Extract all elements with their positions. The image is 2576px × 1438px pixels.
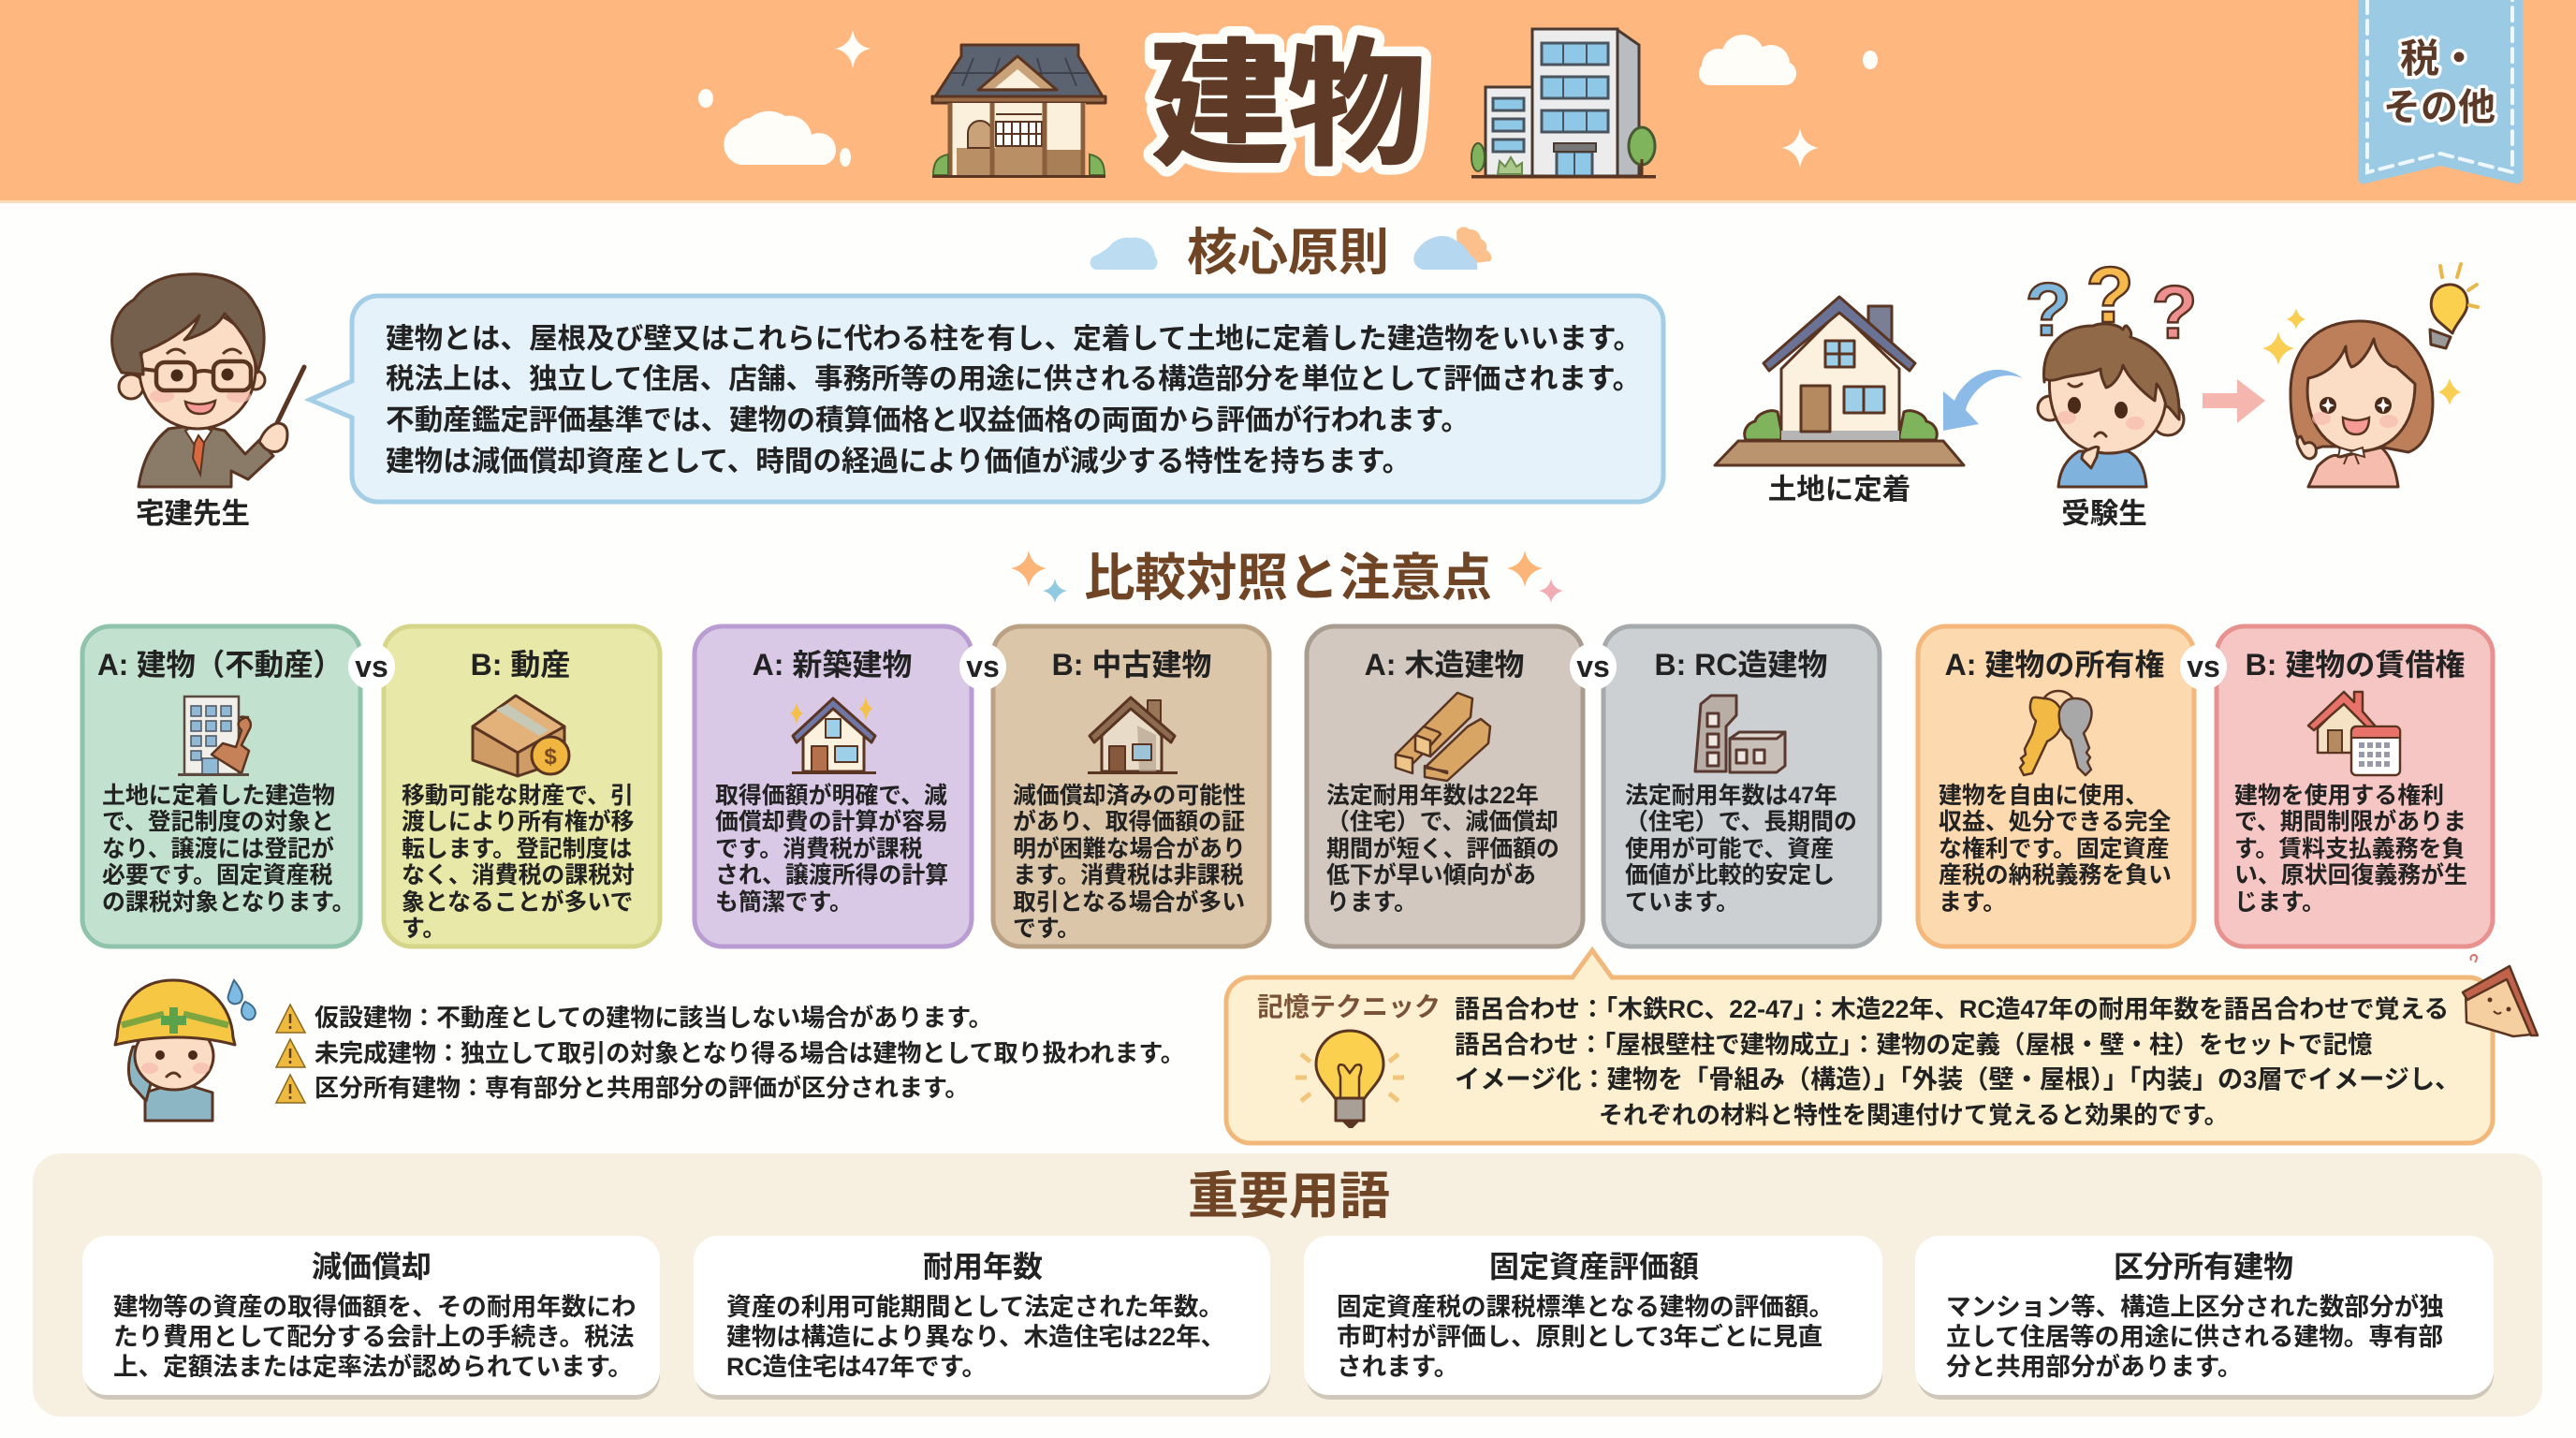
comparison pair 4: [1918, 626, 2493, 946]
vs badge: [1570, 643, 1617, 690]
card: movable property: 転します。登記制度は: [402, 836, 633, 862]
tag ribbon: [2358, 0, 2523, 183]
term card: condominium: 立して住居等の用途に供される建物。専有部: [1946, 1323, 2443, 1351]
term card: useful life: [694, 1236, 1270, 1400]
card: ownership: 収益、処分できる完全: [1939, 809, 2172, 835]
icon: building and stamp: [178, 697, 251, 776]
card: movable property: 渡しにより所有権が移: [402, 808, 635, 835]
card: used building: 明が困難な場合があり: [1013, 835, 1246, 862]
card: new building: [695, 626, 972, 946]
term card: depreciation: 減価償却: [312, 1250, 432, 1284]
term card: depreciation: 上、定額法または定率法が認められています。: [113, 1353, 633, 1381]
card: lease right: で、期間制限がありま: [2234, 808, 2466, 835]
icon: light bulb: [2430, 264, 2478, 348]
card: building real estate: 土地に定着した建造物: [102, 783, 335, 809]
card: new building: 価償却費の計算が容易: [715, 808, 948, 835]
card: RC building: B: RC造建物: [1655, 648, 1827, 682]
arrow: understanding: [2203, 379, 2265, 423]
memory techniques text: 語呂合わせ：「屋根壁柱で建物成立」：建物の定義（屋根・壁・柱）をセットで記憶: [1455, 1031, 2372, 1059]
vs badge: vs: [2187, 650, 2220, 683]
term card: assessed value: [1304, 1236, 1882, 1400]
core principle text: 不動産鑑定評価基準では、建物の積算価格と収益価格の両面から評価が行われます。: [386, 404, 1470, 436]
card: lease right: 建物を使用する権利: [2234, 783, 2444, 809]
term card: useful life: 建物は構造により異なり、木造住宅は22年、: [726, 1323, 1225, 1351]
card: ownership: [1918, 626, 2194, 946]
card: building real estate: [82, 626, 360, 946]
icon: house and calendar: [2308, 692, 2400, 775]
vs badge: vs: [966, 650, 1000, 683]
term card: assessed value: 固定資産評価額: [1489, 1250, 1699, 1284]
icon: keys: [2020, 691, 2092, 775]
card: RC building: 価値が比較的安定し: [1625, 861, 1835, 888]
card: lease right: い、原状回復義務が生: [2234, 861, 2467, 888]
warnings list: [276, 1004, 1185, 1103]
card: used building: 減価償却済みの可能性: [1013, 783, 1246, 809]
term card: depreciation: たり費用として配分する会計上の手続き。税法: [113, 1323, 635, 1351]
worker character: [115, 980, 256, 1121]
icon: lumber: [1396, 693, 1490, 781]
card: used building: ます。消費税は非課税: [1013, 862, 1244, 888]
card: ownership: 建物を自由に使用、: [1939, 783, 2148, 809]
card: movable property: 象となることが多いで: [402, 888, 633, 916]
term card: useful life: 資産の利用可能期間として法定された年数。: [726, 1293, 1223, 1321]
memory techniques text: それぞれの材料と特性を関連付けて覚えると効果的です。: [1599, 1101, 2229, 1129]
icon: new house with sparkles: [790, 697, 876, 774]
heading: core principle with clouds: [1090, 225, 1491, 281]
term card: depreciation: [82, 1236, 660, 1400]
card: building real estate: 必要です。固定資産税: [102, 862, 333, 888]
comparison pair 2: [695, 626, 1269, 946]
card: lease right: B: 建物の賃借権: [2246, 648, 2465, 682]
card: RC building: 法定耐用年数は47年: [1625, 783, 1837, 809]
card: used building: B: 中古建物: [1052, 648, 1211, 682]
icon: old house: [1088, 697, 1178, 774]
card: movable property: なく、消費税の課税対: [402, 862, 635, 888]
vs badge: [959, 643, 1006, 690]
card: used building: です。: [1013, 916, 1080, 942]
term card: condominium: [1915, 1236, 2494, 1400]
card: building real estate: なり、譲渡には登記が: [102, 835, 334, 862]
card: ownership: な権利です。固定資産: [1939, 836, 2169, 862]
card: lease right: [2217, 626, 2493, 946]
core principle text: 建物は減価償却資産として、時間の経過により価値が減少する特性を持ちます。: [386, 445, 1411, 477]
card: new building: 取得価額が明確で、減: [715, 782, 947, 809]
icon: office building: [1471, 29, 1656, 178]
card: movable property: B: 動産: [471, 648, 570, 682]
core principle text: 建物とは、屋根及び壁又はこれらに代わる柱を有し、定着して土地に定着した建造物をいいます。: [386, 323, 1642, 355]
term card: assessed value: されます。: [1337, 1353, 1458, 1381]
key terms heading: 重要用語: [1188, 1168, 1390, 1225]
card: RC building: ています。: [1625, 889, 1739, 916]
question marks: [2026, 251, 2197, 354]
card: ownership: ます。: [1939, 889, 2006, 916]
card: ownership: A: 建物の所有権: [1945, 648, 2164, 682]
term card: assessed value: 固定資産税の課税標準となる建物の評価額。: [1337, 1293, 1834, 1321]
card: new building: され、譲渡所得の計算: [715, 862, 948, 888]
comparison pair 3: [1307, 626, 1880, 946]
card: lease right: す。賃料支払義務を負: [2234, 836, 2465, 862]
memory label: 記憶テクニック: [1257, 992, 1441, 1021]
card: wooden building: 法定耐用年数は22年: [1326, 783, 1539, 809]
teacher body: [139, 425, 273, 487]
card: RC building: 使用が可能で、資産: [1625, 835, 1834, 862]
enlightened girl: [2262, 264, 2478, 487]
term card: depreciation: 建物等の資産の取得価額を、その耐用年数にわ: [113, 1293, 636, 1321]
land label: 土地に定着: [1768, 474, 1910, 506]
card: RC building: [1603, 626, 1880, 946]
title: 建物: [1151, 29, 1425, 182]
teacher character: [112, 274, 304, 487]
card: building real estate: の課税対象となります。: [102, 889, 356, 916]
question marks: ?: [2086, 251, 2134, 339]
warnings list: 仮設建物：不動産としての建物に該当しない場合があります。: [315, 1004, 993, 1032]
card: new building: です。消費税が課税: [715, 835, 923, 862]
icon: traditional japanese house: [932, 45, 1105, 178]
term card: condominium: マンション等、構造上区分された数部分が独: [1946, 1293, 2444, 1321]
icon: small house mascot: [2463, 955, 2538, 1036]
term card: assessed value: 市町村が評価し、原則として3年ごとに見直: [1337, 1323, 1822, 1351]
card: building real estate: で、登記制度の対象と: [102, 809, 334, 835]
header decoration: clouds and sparkles: [698, 30, 1878, 168]
icon: warning: [276, 1005, 305, 1103]
icon: RC building: [1695, 696, 1785, 772]
vs badge: [2180, 643, 2227, 690]
card: wooden building: [1307, 626, 1583, 946]
heading: comparison with sparkles: 比較対照と注意点: [1084, 550, 1492, 607]
heading: core principle with clouds: 核心原則: [1187, 225, 1389, 281]
question marks: ?: [2152, 271, 2197, 354]
term card: useful life: 耐用年数: [923, 1250, 1043, 1284]
memory technique callout: [1226, 950, 2493, 1143]
card: wooden building: 期間が短く、評価額の: [1326, 835, 1559, 862]
header band: [0, 0, 2576, 203]
comparison pair 1: [82, 626, 660, 946]
card: wooden building: ります。: [1326, 889, 1417, 916]
card: wooden building: A: 木造建物: [1365, 648, 1524, 682]
card: lease right: じます。: [2234, 889, 2325, 916]
key terms panel: [33, 1153, 2542, 1416]
pointer: [275, 367, 304, 427]
term card: useful life: RC造住宅は47年です。: [726, 1353, 987, 1381]
card: used building: [993, 626, 1269, 946]
warnings list: 区分所有建物：専有部分と共用部分の評価が区分されます。: [315, 1074, 969, 1102]
speech bubble: [310, 296, 1663, 502]
card: used building: 取引となる場合が多い: [1013, 888, 1245, 916]
card: used building: があり、取得価額の証: [1013, 808, 1245, 835]
card: building real estate: A: 建物（不動産）: [97, 648, 343, 682]
vs badge: [348, 643, 395, 690]
vs badge: vs: [355, 650, 388, 683]
student label: 受験生: [2061, 498, 2147, 530]
icon: cardboard box and coin: [473, 696, 569, 776]
card: movable property: 移動可能な財産で、引: [402, 783, 634, 809]
tag ribbon: その他: [2383, 87, 2496, 128]
arrow: student to house: [1943, 370, 2023, 431]
student boy: [2026, 251, 2197, 487]
card: wooden building: （住宅）で、減価償却: [1326, 809, 1559, 835]
question marks: ?: [2026, 268, 2071, 351]
card: movable property: す。: [402, 916, 446, 942]
icon: house on land: [1715, 297, 1964, 465]
card: new building: も簡潔です。: [715, 889, 853, 916]
memory techniques text: 語呂合わせ：「木鉄RC、22-47」：木造22年、RC造47年の耐用年数を語呂合わせで覚える: [1455, 995, 2449, 1023]
vs badge: vs: [1576, 650, 1610, 683]
card: RC building: （住宅）で、長期間の: [1625, 809, 1857, 835]
sparkles: [2262, 308, 2461, 405]
memory techniques text: イメージ化：建物を「骨組み（構造）」「外装（壁・屋根）」「内装」の3層でイメージし、: [1455, 1064, 2460, 1093]
term card: condominium: 区分所有建物: [2114, 1250, 2293, 1284]
icon: light bulb: [1295, 1031, 1404, 1128]
term card: condominium: 分と共用部分があります。: [1946, 1353, 2242, 1381]
title: 建物: [1151, 29, 1425, 182]
card: new building: A: 新築建物: [753, 648, 912, 682]
warnings list: 未完成建物：独立して取引の対象となり得る場合は建物として取り扱われます。: [315, 1039, 1185, 1067]
card: wooden building: 低下が早い傾向があ: [1326, 861, 1536, 888]
teacher label: 宅建先生: [136, 498, 250, 530]
card: ownership: 産税の納税義務を負い: [1939, 862, 2172, 888]
icon: cardboard box and coin: $: [544, 744, 557, 770]
tag ribbon: 税・: [2400, 37, 2479, 81]
card: movable property: [384, 626, 660, 946]
core principle text: 税法上は、独立して住居、店舗、事務所等の用途に供される構造部分を単位として評価されます。: [386, 363, 1641, 395]
